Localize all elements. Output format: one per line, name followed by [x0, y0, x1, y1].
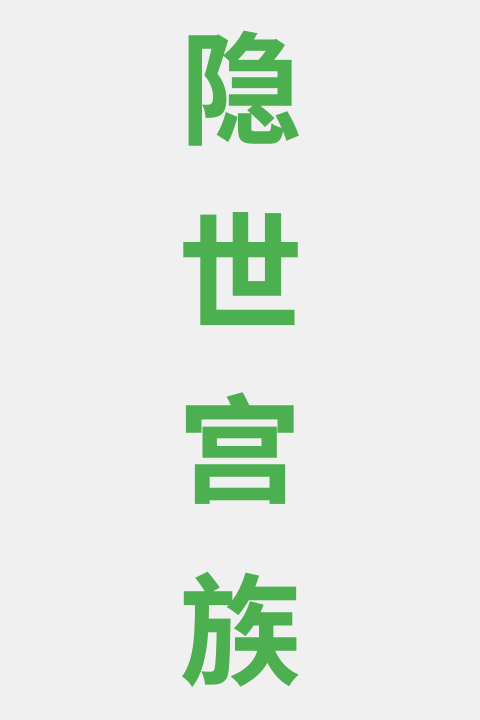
character: 宫: 宫	[177, 388, 302, 519]
character: 隐: 隐	[180, 24, 302, 161]
character: 族: 族	[180, 567, 301, 702]
character: 世: 世	[178, 205, 303, 348]
